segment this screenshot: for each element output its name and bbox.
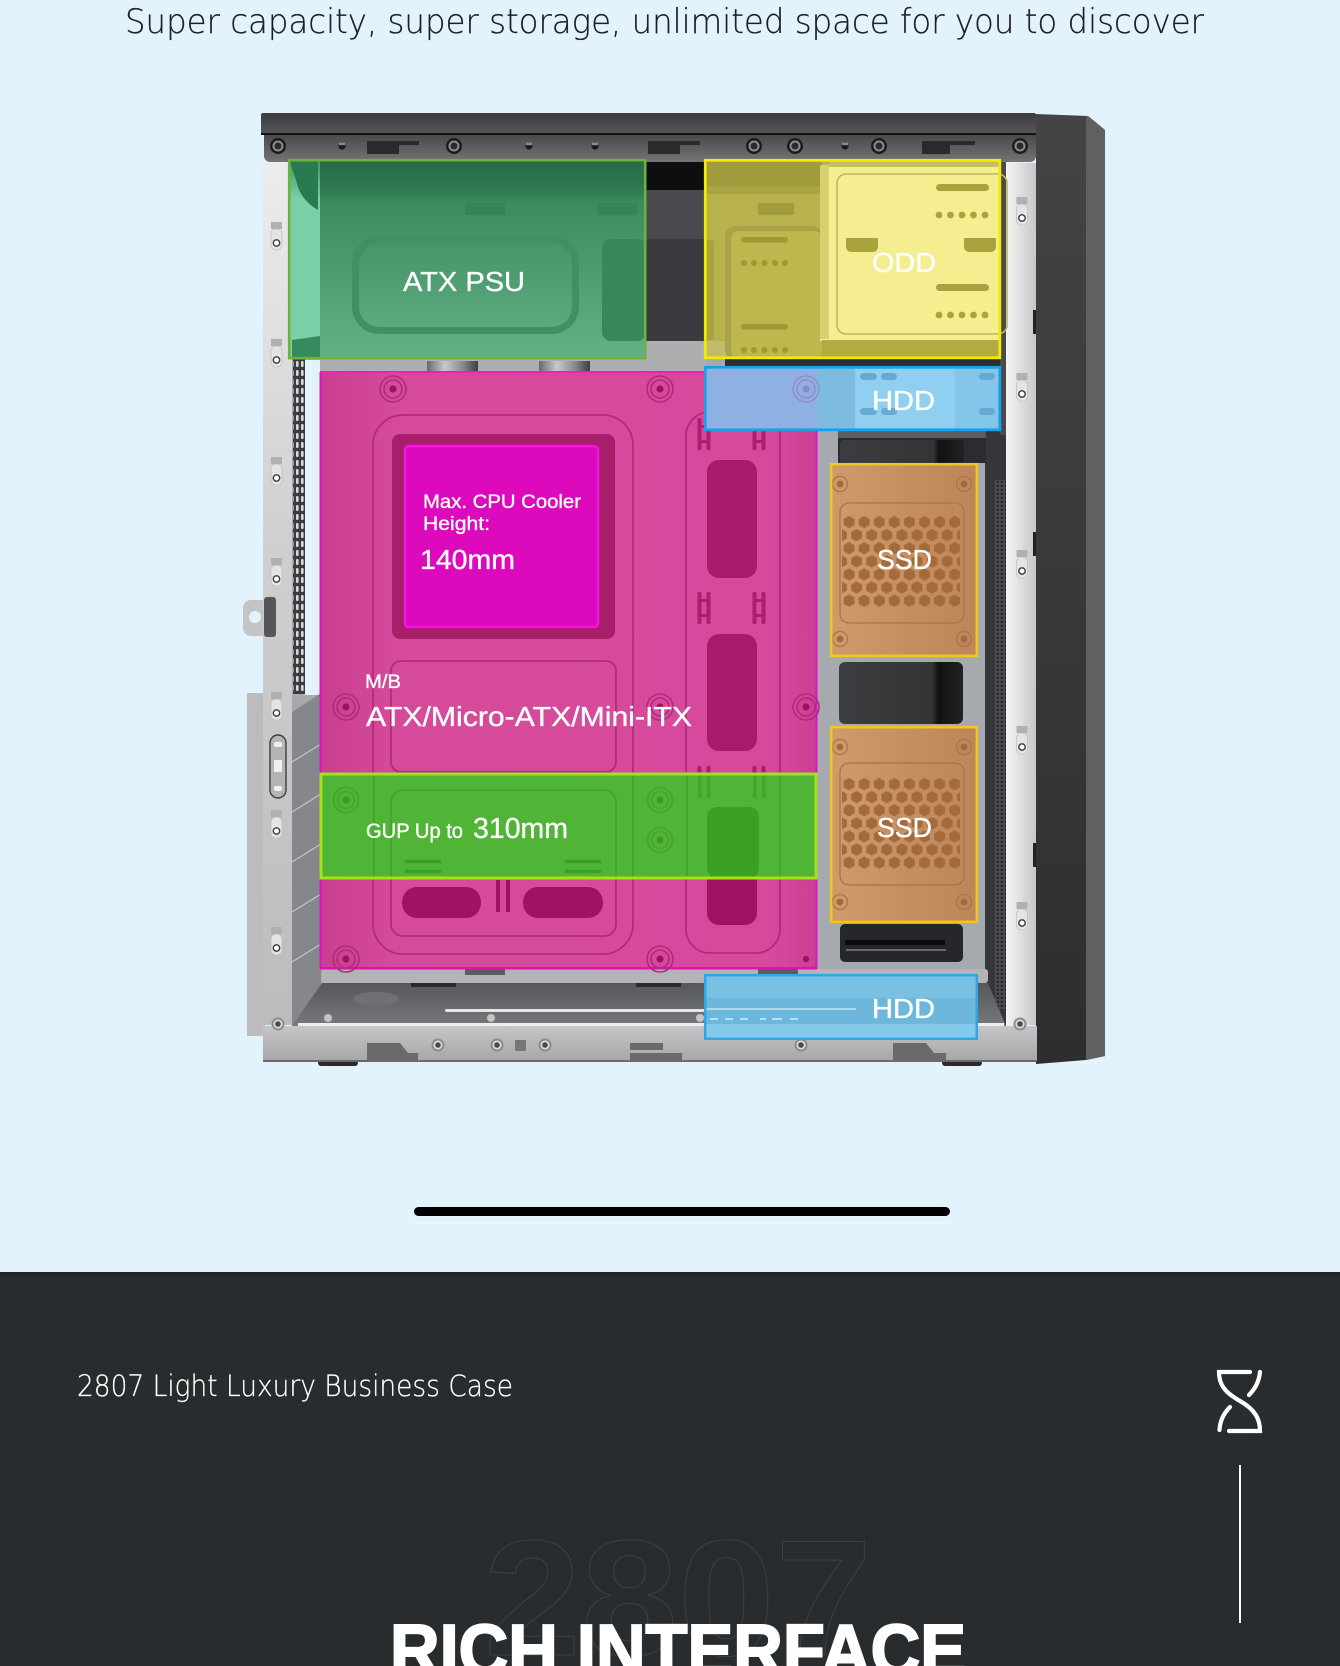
left rail — [243, 163, 292, 1025]
label: SSD: SSD — [877, 544, 932, 575]
divider bar — [414, 1207, 950, 1224]
PC case diagram — [243, 113, 1105, 1066]
panel: SSD upper — [830, 463, 978, 657]
front panel — [1036, 114, 1105, 1064]
value: 310mm: 310mm — [473, 813, 568, 845]
top bar — [261, 113, 1036, 162]
vertical line — [1239, 1465, 1241, 1623]
label: HDD: HDD — [872, 993, 935, 1024]
page background — [0, 0, 1340, 1272]
label: motherboard size: M/B — [365, 672, 401, 693]
panel: ODD — [704, 159, 1007, 359]
label: SSD: SSD — [877, 812, 932, 843]
panel: HDD lower — [704, 974, 978, 1040]
panel: CPU cooler — [392, 434, 615, 639]
value: 140mm: 140mm — [420, 544, 515, 575]
subtitle: 2807 Light Luxury Business Case — [77, 1369, 513, 1403]
panel: ATX PSU — [288, 159, 646, 359]
case body — [247, 160, 1006, 1036]
panel: GPU — [321, 774, 816, 878]
bottom bar — [263, 1018, 1037, 1066]
label: PSU: ATX PSU — [403, 266, 525, 297]
panel: HDD upper — [704, 366, 1001, 431]
panel: motherboard — [320, 371, 819, 975]
label: height line: Height: — [423, 513, 490, 535]
dark section — [0, 1272, 1340, 1666]
label: HDD: HDD — [872, 385, 935, 416]
label: motherboard formats: ATX/Micro-ATX/Mini-ITX — [366, 701, 692, 732]
label: GPU: GUP Up to — [366, 820, 463, 843]
title: Super capacity, super storage, unlimited space for you to discover — [125, 2, 1204, 42]
label: cooler height: Max. CPU Cooler — [423, 491, 582, 513]
right rail — [1006, 163, 1037, 1025]
icon: hourglass — [1219, 1372, 1260, 1431]
panel: SSD lower — [830, 726, 978, 923]
label: ODD: ODD — [872, 247, 936, 278]
